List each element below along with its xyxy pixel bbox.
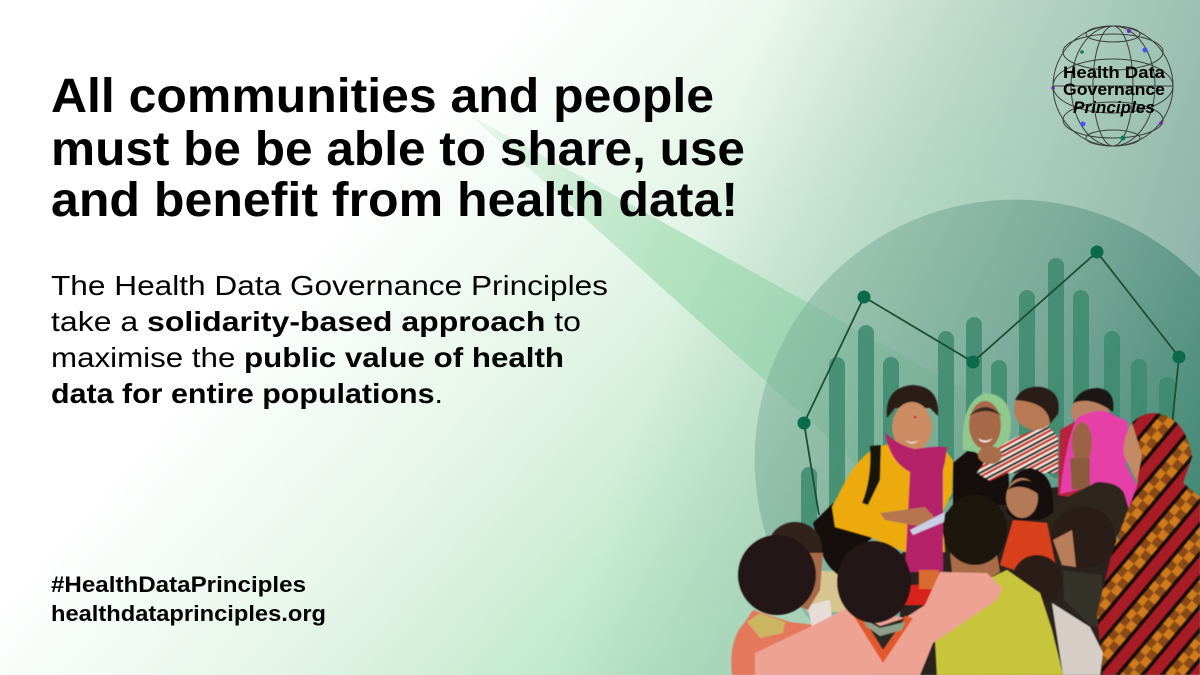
face bbox=[892, 402, 932, 452]
body text: The Health Data Governance Principles bbox=[51, 270, 608, 301]
title: and benefit from health data! bbox=[51, 174, 738, 227]
black bag bbox=[812, 502, 872, 575]
logo text: Health Data bbox=[1063, 63, 1166, 82]
notebook bbox=[910, 512, 945, 535]
photo: community group bbox=[731, 385, 1200, 675]
globe nodes bbox=[1051, 29, 1163, 140]
boy in yellow-green sweater bbox=[933, 495, 1063, 675]
title bbox=[51, 70, 745, 227]
body text: take a solidarity-based approach to bbox=[51, 306, 581, 337]
title: All communities and people bbox=[51, 70, 714, 123]
hand bbox=[880, 507, 935, 526]
red garment and orange cuff bbox=[905, 570, 943, 605]
bar chart bbox=[801, 258, 1175, 557]
footer: hashtag and website: healthdataprinciples.org bbox=[51, 601, 326, 626]
yellow sweater bbox=[832, 444, 953, 552]
hair bbox=[887, 385, 938, 418]
body text bbox=[51, 270, 608, 409]
bindi bbox=[914, 416, 916, 418]
logo text: Governance bbox=[1063, 80, 1165, 99]
globe wireframe bbox=[1053, 26, 1173, 146]
table surface bbox=[806, 570, 848, 612]
dark backing of the crowd bbox=[900, 480, 1130, 675]
line chart bbox=[798, 246, 1186, 515]
man at back bbox=[1058, 388, 1113, 500]
woman in pink scarf bbox=[1047, 411, 1138, 540]
child in striped top bbox=[977, 387, 1059, 481]
logo text bbox=[1063, 63, 1166, 117]
bag strap bbox=[862, 445, 881, 505]
small child with dark jacket bbox=[1051, 506, 1115, 630]
magenta scarf bbox=[885, 433, 947, 572]
girl in red sweater bbox=[1000, 468, 1055, 572]
smile bbox=[905, 440, 919, 444]
logo: globe badge bbox=[1051, 26, 1173, 146]
panel: chart circle bbox=[755, 200, 1200, 675]
woman in green scarf bbox=[953, 393, 1011, 505]
logo text: Principles bbox=[1073, 98, 1155, 117]
woman with yellow sweater bbox=[813, 385, 953, 575]
back of left boys bbox=[731, 522, 832, 675]
body text: maximise the public value of health bbox=[51, 342, 564, 373]
boy in grey sweater bbox=[1012, 555, 1103, 675]
light beam bbox=[470, 115, 1010, 620]
body text: data for entire populations . bbox=[51, 378, 443, 409]
title: must be be able to share, use bbox=[51, 123, 745, 176]
woman in patterned shawl bbox=[1097, 413, 1200, 675]
footer: hashtag and website: #HealthDataPrinciples bbox=[51, 572, 306, 597]
footer: hashtag and website bbox=[51, 572, 326, 626]
boy in pink sweater bbox=[755, 541, 1002, 675]
